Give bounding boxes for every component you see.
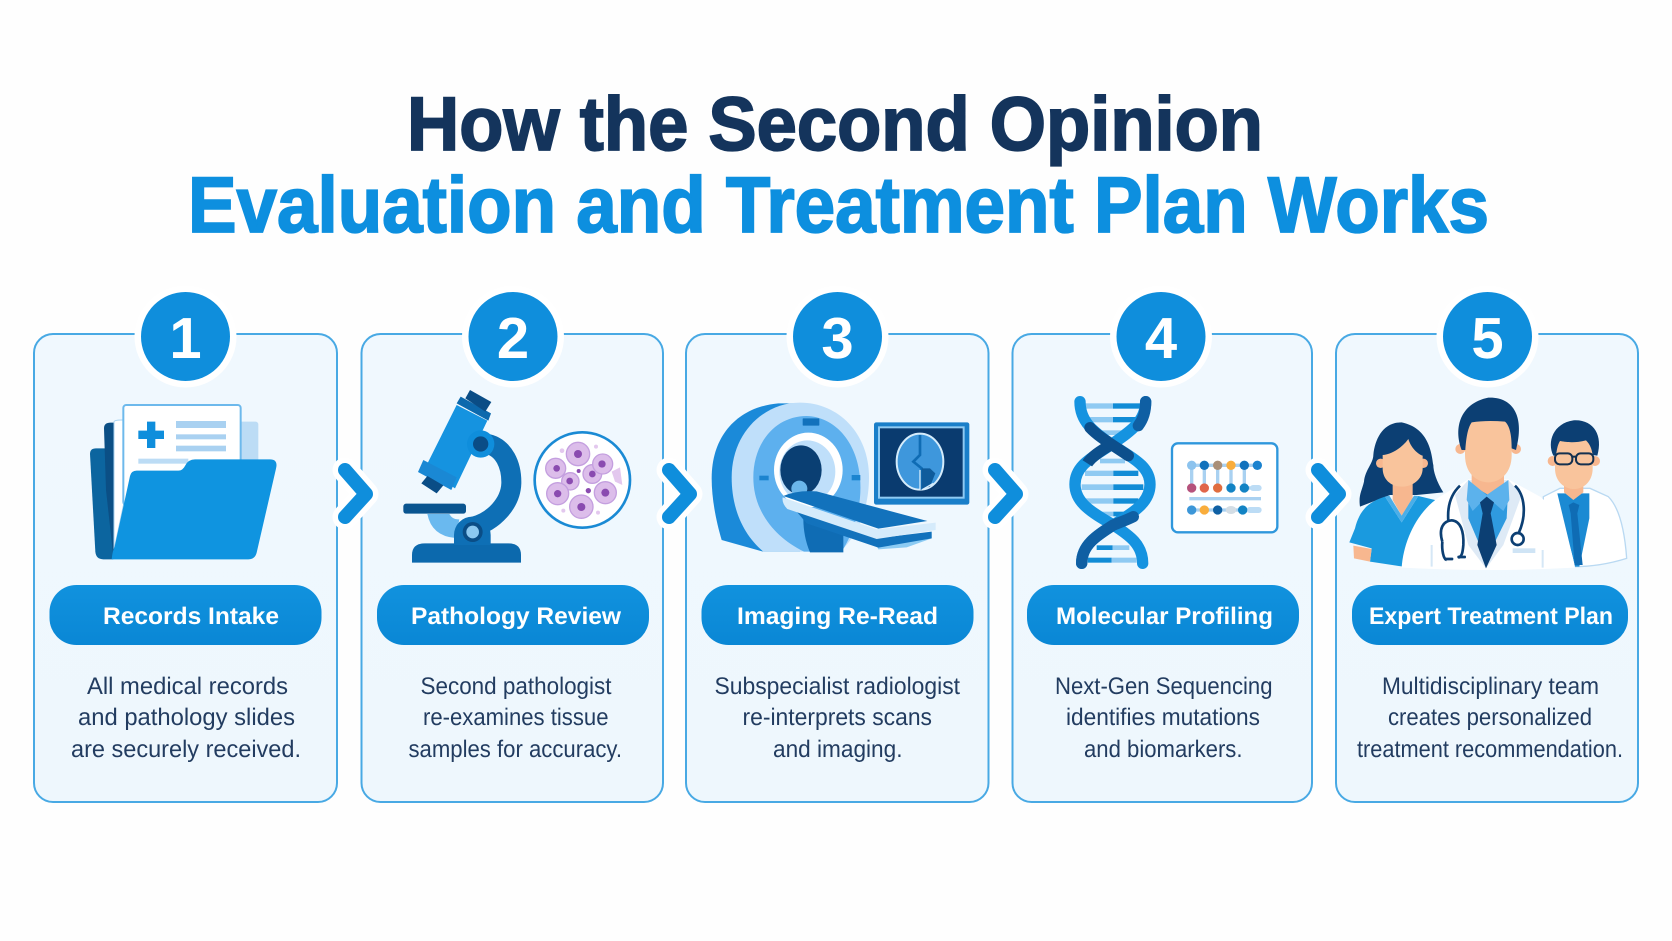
description: All medical records bbox=[87, 673, 288, 700]
arrow: step 1 to 2 bbox=[345, 470, 366, 517]
title line 2: Evaluation and Treatment Plan Works bbox=[188, 160, 1489, 249]
number badge 1: 1 bbox=[169, 306, 202, 371]
description: and biomarkers. bbox=[1084, 736, 1242, 763]
lead doctor bbox=[1402, 398, 1575, 570]
label pill: Molecular Profiling bbox=[1056, 603, 1273, 630]
icon: brain scan monitor bbox=[874, 422, 969, 505]
panel: step 5 expert treatment plan bbox=[1336, 286, 1638, 802]
number badge 4: 4 bbox=[1145, 306, 1177, 371]
number badge 5 bbox=[1436, 286, 1538, 388]
label pill: Pathology Review bbox=[411, 603, 621, 630]
label pill bbox=[702, 585, 974, 645]
nurse bbox=[1349, 422, 1443, 567]
label pill: Expert Treatment Plan bbox=[1369, 603, 1613, 630]
number badge 4 bbox=[1110, 286, 1212, 388]
number badge 2: 2 bbox=[497, 306, 529, 371]
arrow: step 4 to 5 bbox=[1318, 470, 1339, 517]
icon: cell sample bbox=[535, 432, 630, 528]
label pill bbox=[1352, 585, 1628, 645]
description: Next-Gen Sequencing bbox=[1055, 673, 1272, 700]
panel: step 4 molecular profiling bbox=[1012, 286, 1312, 802]
icon: DNA helix bbox=[1075, 402, 1150, 563]
card border bbox=[362, 334, 663, 802]
panel: step 1 records intake bbox=[34, 286, 337, 802]
description: re-interprets scans bbox=[742, 704, 932, 731]
label pill: Records Intake bbox=[103, 603, 279, 630]
icon: medical team bbox=[1349, 398, 1627, 570]
label pill bbox=[1027, 585, 1299, 645]
doctor with glasses bbox=[1543, 420, 1627, 567]
title line 1: How the Second Opinion bbox=[407, 82, 1263, 167]
description bbox=[1055, 673, 1272, 763]
description bbox=[714, 673, 960, 763]
description: and imaging. bbox=[773, 736, 902, 763]
description bbox=[408, 673, 622, 763]
description: re-examines tissue bbox=[423, 704, 608, 731]
card border bbox=[1336, 334, 1638, 802]
panel: step 2 pathology review bbox=[362, 286, 663, 802]
number badge 2 bbox=[462, 286, 564, 388]
description: are securely received. bbox=[71, 736, 301, 763]
icon: sequencing panel bbox=[1172, 443, 1277, 532]
description: Subspecialist radiologist bbox=[714, 673, 960, 700]
number badge 1 bbox=[134, 286, 236, 388]
description: and pathology slides bbox=[78, 704, 295, 731]
description: Second pathologist bbox=[420, 673, 612, 700]
icon: microscope bbox=[403, 390, 521, 563]
panel: step 3 imaging re-read bbox=[686, 286, 988, 802]
card border bbox=[34, 334, 337, 802]
icon: folder with records bbox=[90, 405, 277, 559]
description: samples for accuracy. bbox=[408, 736, 622, 763]
card border bbox=[686, 334, 988, 802]
label pill bbox=[50, 585, 322, 645]
number badge 3 bbox=[786, 286, 888, 388]
arrow: step 3 to 4 bbox=[995, 470, 1016, 517]
card border bbox=[1012, 334, 1312, 802]
number badge 3: 3 bbox=[821, 306, 854, 371]
icon: MRI scanner bbox=[712, 403, 936, 552]
label pill bbox=[377, 585, 649, 645]
description: treatment recommendation. bbox=[1357, 736, 1623, 763]
description bbox=[1357, 673, 1623, 763]
description: creates personalized bbox=[1388, 704, 1592, 731]
description bbox=[71, 673, 301, 763]
description: Multidisciplinary team bbox=[1382, 673, 1599, 700]
arrow: step 2 to 3 bbox=[669, 470, 690, 517]
title bbox=[188, 82, 1489, 249]
description: identifies mutations bbox=[1066, 704, 1260, 731]
label pill: Imaging Re-Read bbox=[737, 603, 938, 630]
number badge 5: 5 bbox=[1471, 306, 1504, 371]
